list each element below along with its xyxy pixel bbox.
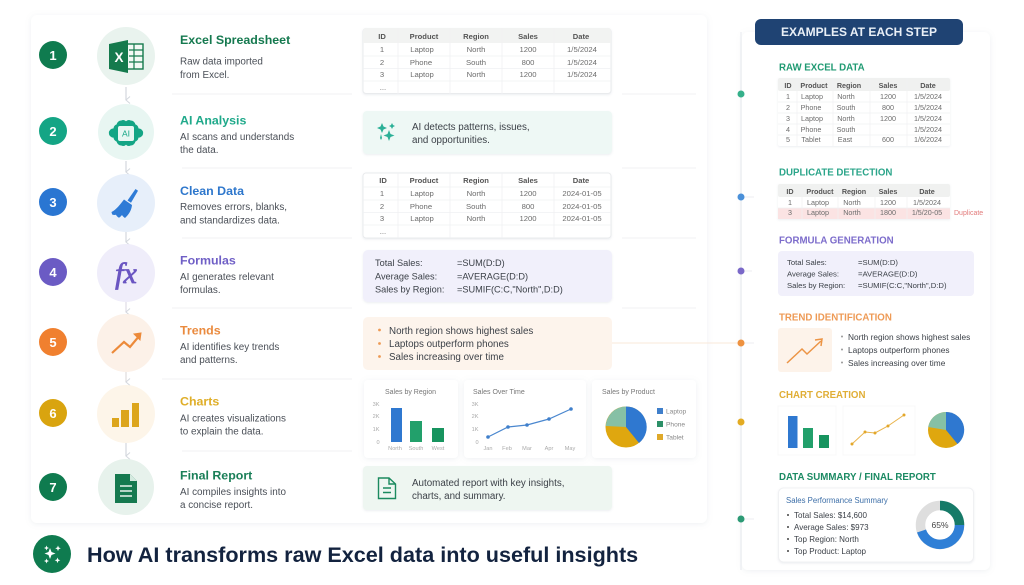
table: 600: [882, 135, 894, 144]
step description: from Excel.: [180, 70, 229, 81]
summary card: Top Product: Laptop: [794, 547, 867, 556]
table: raw preview: Phone: [410, 58, 432, 67]
duplicate tag: Duplicate: [954, 210, 983, 217]
callout: automated report: [363, 466, 612, 510]
table: raw preview: Date: [573, 32, 589, 41]
chart: sales by region: South: [409, 446, 423, 452]
chart: sales by region: [364, 380, 458, 458]
table: 1: [788, 198, 792, 207]
table: 2: [786, 103, 790, 112]
chart: sales over time: May: [565, 446, 575, 452]
step number 6: 6: [49, 406, 57, 421]
table: 1: [786, 92, 790, 101]
heading: DATA SUMMARY / FINAL REPORT: [779, 472, 936, 483]
step description: and patterns.: [180, 355, 238, 366]
table: Product: [806, 187, 834, 196]
table: [778, 78, 950, 146]
step number 3: [39, 188, 67, 216]
table: Sales: [879, 187, 897, 196]
table: South: [837, 103, 855, 112]
table: raw preview: ID: [378, 32, 386, 41]
timeline: [738, 32, 754, 570]
chart: sales over time: Apr: [545, 446, 553, 452]
step 5: Trends: [39, 314, 279, 382]
table: cleaned data: 3: [380, 214, 384, 223]
step title: Clean Data: [180, 184, 244, 198]
table: raw preview: 1200: [519, 45, 537, 54]
table: raw preview: 800: [522, 58, 534, 67]
callout: AI detects: [363, 111, 612, 154]
chart: sales over time: 3K: [472, 402, 479, 408]
table: 1/5/2024: [913, 198, 941, 207]
panel: [778, 251, 974, 296]
step 2: AI Analysis: [39, 104, 294, 172]
table: raw preview: Product: [410, 32, 439, 41]
mini pie chart: [928, 412, 964, 448]
chart: sales over time: [464, 380, 586, 458]
step description: a concise report.: [180, 500, 253, 511]
panel: trend insights: Sales increasing over time: [389, 352, 504, 363]
arrow: [125, 232, 127, 242]
example: data summary: [778, 472, 974, 562]
step number 7: 7: [49, 480, 57, 495]
table: raw preview: Laptop: [410, 70, 434, 79]
table: cleaned data: Region: [463, 176, 489, 185]
table: cleaned data: [363, 173, 611, 238]
step description: the data.: [180, 145, 218, 156]
chart: sales over time: Jan: [483, 446, 493, 452]
table: 1800: [880, 208, 896, 217]
panel: Average Sales:: [787, 270, 839, 278]
step number 1: [39, 41, 67, 69]
chart: sales by region: North: [388, 446, 402, 452]
panel: =AVERAGE(D:D): [858, 270, 918, 278]
heading: TREND IDENTIFICATION: [779, 312, 892, 324]
summary card: Top Region: North: [794, 535, 859, 544]
table: raw preview: Laptop: [410, 45, 434, 54]
arrow: [125, 443, 127, 456]
example: duplicate detection: [778, 168, 983, 219]
step number 5: [39, 328, 67, 356]
chart: sales over time: Mar: [522, 446, 532, 452]
table: cleaned data: Sales: [518, 176, 538, 185]
table: raw preview: 3: [380, 70, 384, 79]
bullets: North region shows highest sales: [848, 332, 970, 342]
table: 800: [882, 103, 894, 112]
table: 3: [788, 208, 792, 217]
table: [778, 184, 950, 219]
step title: AI Analysis: [180, 114, 246, 128]
table: raw preview: 1: [380, 45, 384, 54]
panel: Total Sales:: [787, 258, 827, 267]
table: cleaned data: Laptop: [410, 189, 434, 198]
icon: document: [98, 459, 154, 515]
table: cleaned data: North: [467, 214, 485, 223]
icon: fx: [97, 244, 155, 302]
table: raw preview: 2: [380, 58, 384, 67]
table: Date: [920, 81, 936, 90]
step description: formulas.: [180, 285, 221, 296]
summary card: Total Sales: $14,600: [794, 511, 867, 520]
table: raw preview: Sales: [518, 32, 538, 41]
table: cleaned data: 1200: [519, 214, 537, 223]
panel: trend insights: [363, 317, 612, 370]
headline: How AI transforms raw Excel data into useful insights: [87, 542, 638, 567]
icon: sparkle badge: [33, 535, 71, 573]
step number 2: [39, 117, 67, 145]
step number 1: 1: [49, 48, 57, 63]
table: Date: [919, 187, 935, 196]
table: cleaned data: ID: [379, 176, 387, 185]
step description: Raw data imported: [180, 56, 263, 68]
table: Tablet: [801, 135, 821, 144]
table: 1/6/2024: [914, 135, 942, 144]
icon: sparkles: [377, 123, 395, 141]
chart: sales over time: 2K: [472, 414, 479, 420]
table: Phone: [801, 125, 821, 134]
chart: sales by region: 1K: [373, 427, 380, 433]
arrow: [125, 161, 127, 172]
table: Sales: [879, 81, 897, 90]
table: cleaned data: Phone: [410, 202, 432, 211]
table: cleaned data: 800: [522, 202, 534, 211]
step dividers: [162, 94, 696, 451]
step title: Charts: [180, 394, 219, 408]
table: East: [838, 135, 852, 144]
table: South: [837, 125, 855, 134]
table: raw preview: 1200: [519, 70, 537, 79]
table: Phone: [801, 103, 821, 112]
arrow: [125, 372, 127, 382]
icon: AI brain: [98, 104, 154, 160]
table: ID: [784, 81, 792, 90]
table: raw preview: Region: [463, 32, 489, 41]
table: Laptop: [807, 208, 829, 217]
mini bar chart: [778, 406, 836, 455]
panel: formulas: Total Sales:: [375, 258, 422, 268]
bullets: Sales increasing over time: [848, 358, 946, 368]
mini line chart: [843, 406, 915, 455]
table: Laptop: [801, 92, 823, 101]
chart: sales over time: Feb: [502, 446, 512, 452]
panel: formulas: =SUMIF(C:C,"North",D:D): [457, 284, 563, 294]
icon: report outline: [378, 478, 396, 498]
chart: sales by product: Sales by Product: [602, 389, 655, 396]
chart: sales over time: Sales Over Time: [473, 389, 525, 396]
heading: CHART CREATION: [779, 390, 865, 401]
table: 1/5/2024: [914, 103, 942, 112]
footer title: [33, 535, 638, 573]
panel: formulas: =SUM(D:D): [457, 258, 505, 268]
step number 4: 4: [49, 265, 57, 280]
heading: RAW EXCEL DATA: [779, 62, 865, 74]
chart: sales by region: 2K: [373, 414, 380, 420]
icon: fx: fx: [115, 257, 138, 290]
arrow: [125, 87, 127, 100]
table: raw preview: North: [467, 45, 485, 54]
step title: Formulas: [180, 254, 236, 268]
icon: broom: [97, 174, 155, 232]
panel: =SUM(D:D): [858, 258, 898, 267]
panel: formulas: Sales by Region:: [375, 284, 444, 294]
step description: AI creates visualizations: [180, 414, 286, 424]
step number 5: 5: [49, 335, 57, 350]
table: North: [837, 114, 855, 123]
table: 1/5/2024: [914, 125, 942, 134]
step number 3: 3: [49, 195, 57, 210]
step description: AI compiles insights into: [180, 487, 286, 498]
arrow: [125, 302, 127, 312]
table: North: [837, 92, 855, 101]
step number 6: [39, 399, 67, 427]
callout text: and opportunities.: [412, 135, 490, 146]
step 7: Final Report: [39, 459, 286, 515]
step 4: Formulas: [39, 244, 274, 312]
table: raw preview: South: [466, 58, 486, 67]
table: cleaned data: 2024-01-05: [562, 202, 602, 211]
example: formula generation: [778, 236, 974, 296]
bullets: [841, 332, 970, 368]
summary card: 65%: [931, 520, 949, 530]
table: Laptop: [801, 114, 823, 123]
step description: AI generates relevant: [180, 272, 274, 283]
callout text: charts, and summary.: [412, 491, 505, 502]
examples header: EXAMPLES AT EACH STEP: [781, 25, 937, 39]
table: raw preview: 1/5/2024: [567, 58, 598, 67]
table: 1200: [880, 92, 896, 101]
example: chart creation: [778, 390, 964, 455]
table: Region: [842, 187, 866, 196]
table: North: [843, 208, 861, 217]
callout text: Automated report with key insights,: [412, 478, 564, 489]
summary card: [778, 488, 974, 562]
step description: AI scans and understands: [180, 132, 294, 143]
chart: sales by product: Tablet: [666, 434, 684, 442]
table: 3: [786, 114, 790, 123]
step title: Final Report: [180, 468, 252, 482]
table: 1/5/2024: [914, 114, 942, 123]
example: raw excel data: [778, 62, 950, 146]
panel: workflow card: [31, 15, 707, 523]
table: raw preview: 1/5/2024: [567, 70, 598, 79]
chart: sales by product: Laptop: [666, 408, 687, 416]
table: cleaned data: 2024-01-05: [562, 214, 602, 223]
panel: trend insights: North region shows highest sales: [389, 326, 533, 337]
callout text: AI detects patterns, issues,: [412, 122, 530, 133]
icon: trend: [778, 328, 832, 372]
icon: bars: [97, 385, 155, 443]
example: trend identification: [778, 312, 970, 372]
step 6: Charts: [39, 385, 286, 456]
table: Laptop: [807, 198, 829, 207]
icon: trend arrow: [97, 314, 155, 372]
chart: sales over time: 1K: [472, 427, 479, 433]
table: cleaned data: Laptop: [410, 214, 434, 223]
table: 1200: [880, 198, 896, 207]
step description: AI identifies key trends: [180, 342, 279, 353]
table: cleaned data: ...: [380, 227, 386, 236]
table: raw preview: ...: [380, 83, 386, 92]
heading: DUPLICATE DETECTION: [779, 168, 892, 178]
step description: and standardizes data.: [180, 216, 280, 226]
step 1: Excel Spreadsheet: [39, 27, 290, 100]
table: cleaned data: 1: [380, 189, 384, 198]
step number 4: [39, 258, 67, 286]
table: 5: [786, 135, 790, 144]
panel: Sales by Region:: [787, 281, 845, 290]
table: raw preview: North: [467, 70, 485, 79]
examples header: [755, 19, 963, 45]
table: ID: [786, 187, 794, 196]
table: Product: [800, 81, 828, 90]
table: North: [843, 198, 861, 207]
panel: formulas: =AVERAGE(D:D): [457, 272, 528, 282]
chart: sales by region: West: [432, 446, 445, 452]
connector from trends to timeline: [612, 342, 741, 344]
bullets: Laptops outperform phones: [848, 345, 949, 355]
chart: sales by product: [592, 380, 696, 458]
table: cleaned data: 2024-01-05: [562, 189, 602, 198]
icon: excel: X: [114, 50, 124, 65]
panel: =SUMIF(C:C,"North",D:D): [858, 281, 947, 290]
step 3: Clean Data: [39, 174, 287, 242]
table: cleaned data: 1200: [519, 189, 537, 198]
table: cleaned data: 2: [380, 202, 384, 211]
summary card: Sales Performance Summary: [786, 496, 888, 505]
table: cleaned data: Product: [410, 176, 439, 185]
table: cleaned data: North: [467, 189, 485, 198]
donut chart: [920, 506, 960, 544]
table: 1/5/20-05: [912, 208, 942, 217]
chart: sales by region: 3K: [373, 402, 380, 408]
heading: FORMULA GENERATION: [779, 236, 894, 246]
chart: sales over time: 0: [475, 440, 479, 446]
step description: to explain the data.: [180, 426, 263, 438]
panel: trend insights: Laptops outperform phones: [389, 339, 509, 350]
panel: examples card: [742, 32, 990, 570]
step title: Trends: [180, 324, 221, 338]
table: raw preview: [363, 28, 611, 94]
icon: AI brain: AI: [122, 128, 130, 138]
table: 1200: [880, 114, 896, 123]
chart: sales by region: 0: [376, 440, 380, 446]
step number 2: 2: [49, 124, 57, 139]
chart: sales by product: Phone: [666, 422, 685, 428]
table: 1/5/2024: [914, 92, 942, 101]
chart: sales by region: Sales by Region: [385, 389, 436, 396]
summary card: Average Sales: $973: [794, 523, 869, 532]
step number 7: [39, 473, 67, 501]
table: cleaned data: Date: [573, 176, 589, 185]
step title: Excel Spreadsheet: [180, 33, 290, 47]
table: Region: [837, 81, 861, 90]
table: cleaned data: South: [466, 202, 486, 211]
step description: Removes errors, blanks,: [180, 202, 287, 213]
table: raw preview: 1/5/2024: [567, 45, 598, 54]
panel: formulas: Average Sales:: [375, 272, 437, 282]
icon: excel: [97, 27, 155, 85]
table: 4: [786, 125, 790, 134]
panel: formulas: [363, 250, 612, 302]
